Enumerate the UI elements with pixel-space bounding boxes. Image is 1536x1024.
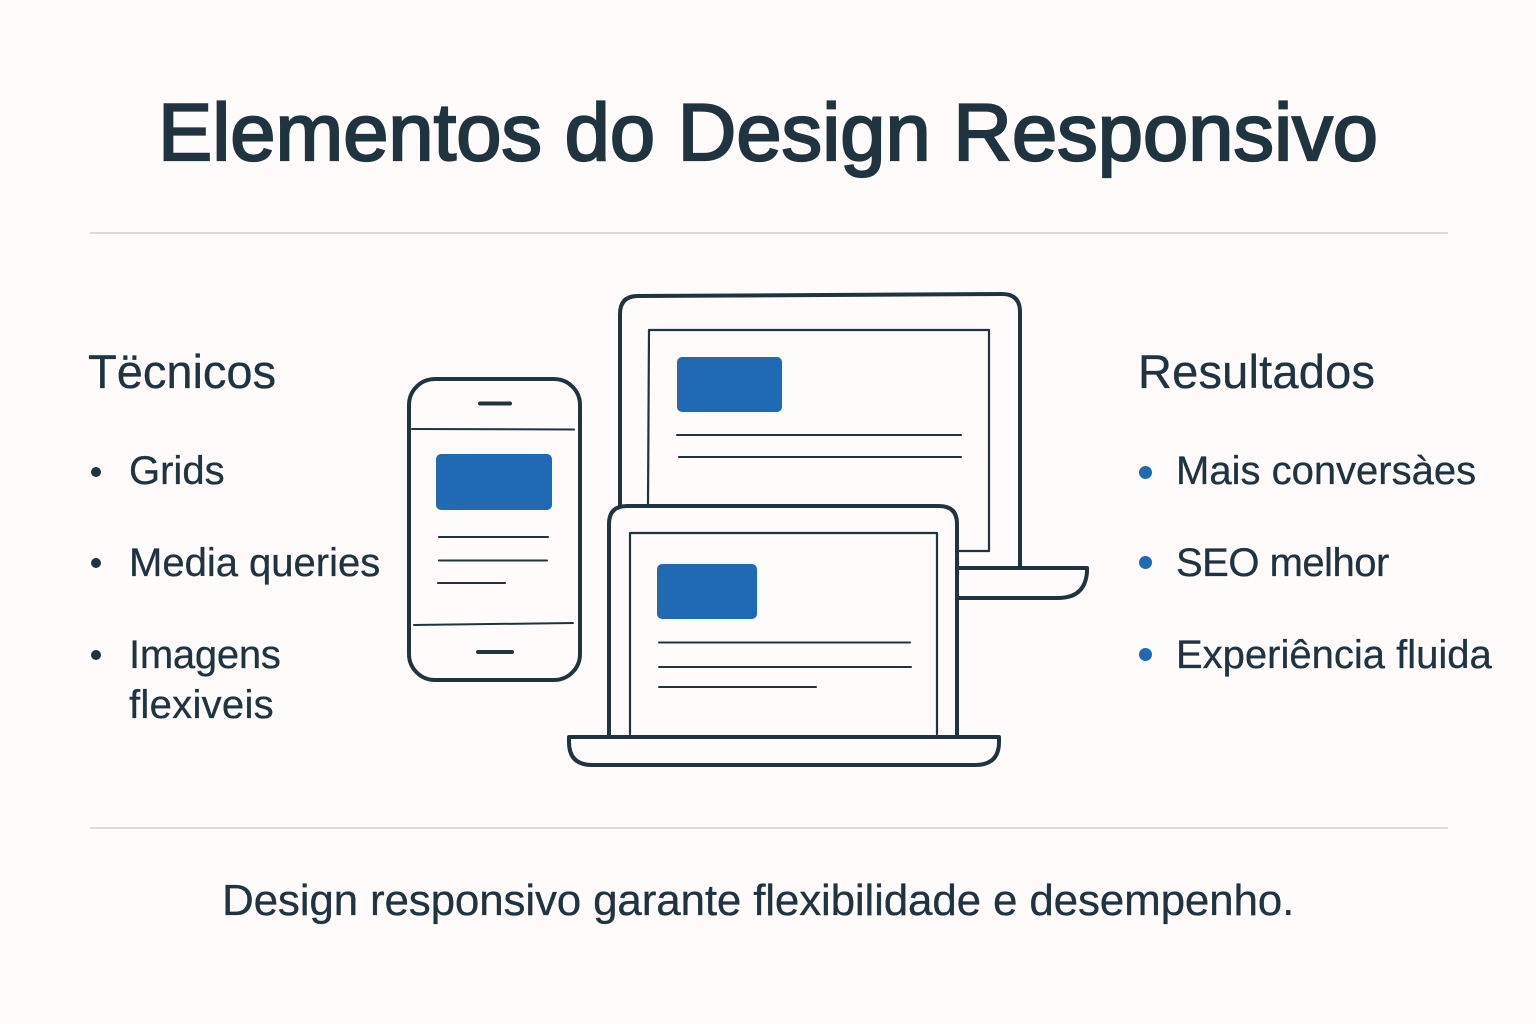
list item: media queries: Media queries [129, 541, 380, 585]
heading: técnicos: Tëcnicos [88, 345, 276, 398]
footer text: Design responsivo garante flexibilidade e desempenho. [222, 876, 1294, 925]
heading: resultados: Resultados [1138, 345, 1375, 398]
device illustration [407, 292, 1089, 767]
panel: resultados [1138, 345, 1492, 677]
list item: mais conversões: Mais conversàes [1176, 449, 1476, 493]
icon: smartphone [409, 379, 580, 680]
panel: técnicos [88, 345, 380, 727]
list item: seo melhor: SEO melhor [1176, 541, 1389, 585]
list item: imagens flexiveis: Imagens [129, 633, 281, 677]
icon: desktop monitor [620, 294, 1087, 598]
list item: imagens flexiveis [91, 633, 281, 727]
list item: experiência fluida: Experiência fluida [1176, 633, 1492, 677]
list item: imagens flexiveis: flexiveis [129, 683, 274, 727]
icon: laptop [569, 506, 999, 765]
title: Elementos do Design Responsivo [158, 88, 1378, 178]
list item: grids: Grids [129, 449, 225, 493]
